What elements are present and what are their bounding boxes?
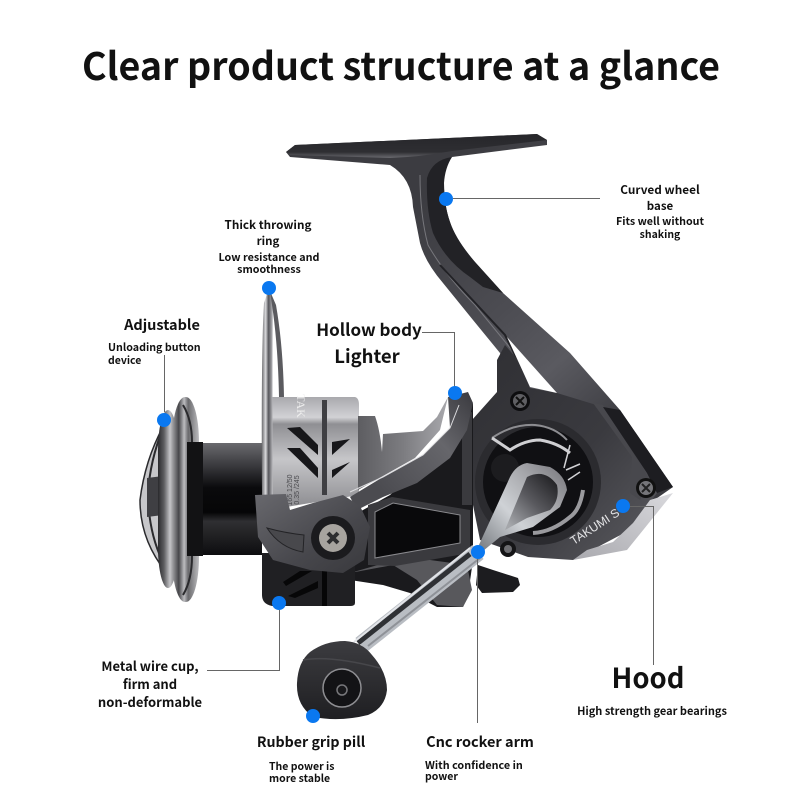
label: cnc rocker arm: Cnc rocker arm <box>426 731 534 752</box>
screws on body <box>500 391 656 557</box>
label: hollow body: Lighter <box>334 343 401 369</box>
spool lip <box>158 397 203 602</box>
label: thick throwing ring: ring <box>257 233 280 249</box>
fishing reel illustration <box>140 134 673 719</box>
label: hood: Hood <box>612 656 684 696</box>
label: adjustable: Adjustable <box>123 314 200 335</box>
silver metal cup: 0.35 /245 <box>294 475 301 505</box>
bail arm <box>255 392 473 573</box>
stem cutout <box>507 337 557 393</box>
label: curved wheel base: shaking <box>640 227 681 242</box>
label: adjustable <box>108 314 201 368</box>
main body <box>472 345 673 560</box>
label: thick throwing ring <box>218 216 320 277</box>
label: curved wheel base <box>616 181 704 242</box>
brand label: TAKUMI S <box>568 506 622 548</box>
label: curved wheel base: Fits well without <box>616 214 704 229</box>
black spool cylinder <box>192 443 262 555</box>
silver metal cup: 165 12/50 <box>287 474 294 506</box>
frame under the bail arm <box>345 403 520 607</box>
label: hollow body: Hollow body <box>316 316 422 341</box>
label: rubber grip pill: The power is <box>269 759 334 774</box>
label: curved wheel base: base <box>647 198 674 214</box>
label: rubber grip pill <box>257 732 366 786</box>
silver metal cup: TAK <box>294 394 308 418</box>
label: metal wire cup <box>98 656 202 711</box>
silver metal cup <box>268 394 359 510</box>
label: cnc rocker arm: With confidence in <box>425 757 523 773</box>
rocker arm shaft <box>354 548 480 646</box>
label: adjustable: Unloading button <box>108 340 201 355</box>
reel stem and foot <box>286 134 673 510</box>
rotor block <box>358 397 448 490</box>
label: thick throwing ring: Low resistance and <box>218 249 320 265</box>
bail wire ring <box>262 288 284 495</box>
label: adjustable: device <box>108 353 141 368</box>
label: rubber grip pill: more stable <box>269 771 330 786</box>
label: metal wire cup: non-deformable <box>98 692 202 711</box>
marker dots <box>157 192 630 723</box>
label: thick throwing ring: Thick throwing <box>225 216 311 233</box>
label: thick throwing ring: smoothness <box>237 262 301 277</box>
label: metal wire cup: Metal wire cup, <box>101 656 199 675</box>
label: rubber grip pill: Rubber grip pill <box>257 732 366 752</box>
rocker hub shading <box>505 474 558 530</box>
rubber handle knob <box>297 641 387 719</box>
label: cnc rocker arm <box>425 731 534 784</box>
label: cnc rocker arm: power <box>425 769 458 784</box>
lower black cup <box>262 553 355 606</box>
spool dome <box>140 427 176 572</box>
leader lines <box>164 198 654 723</box>
rotor disc <box>475 419 601 545</box>
label: curved wheel base: Curved wheel <box>620 181 700 198</box>
rocker arm <box>478 463 567 551</box>
label: hollow body <box>316 316 422 369</box>
label: hood: High strength gear bearings <box>577 703 727 719</box>
label: hood <box>577 656 727 719</box>
label: metal wire cup: firm and <box>123 674 177 693</box>
title: Clear product structure at a glance <box>82 36 720 91</box>
